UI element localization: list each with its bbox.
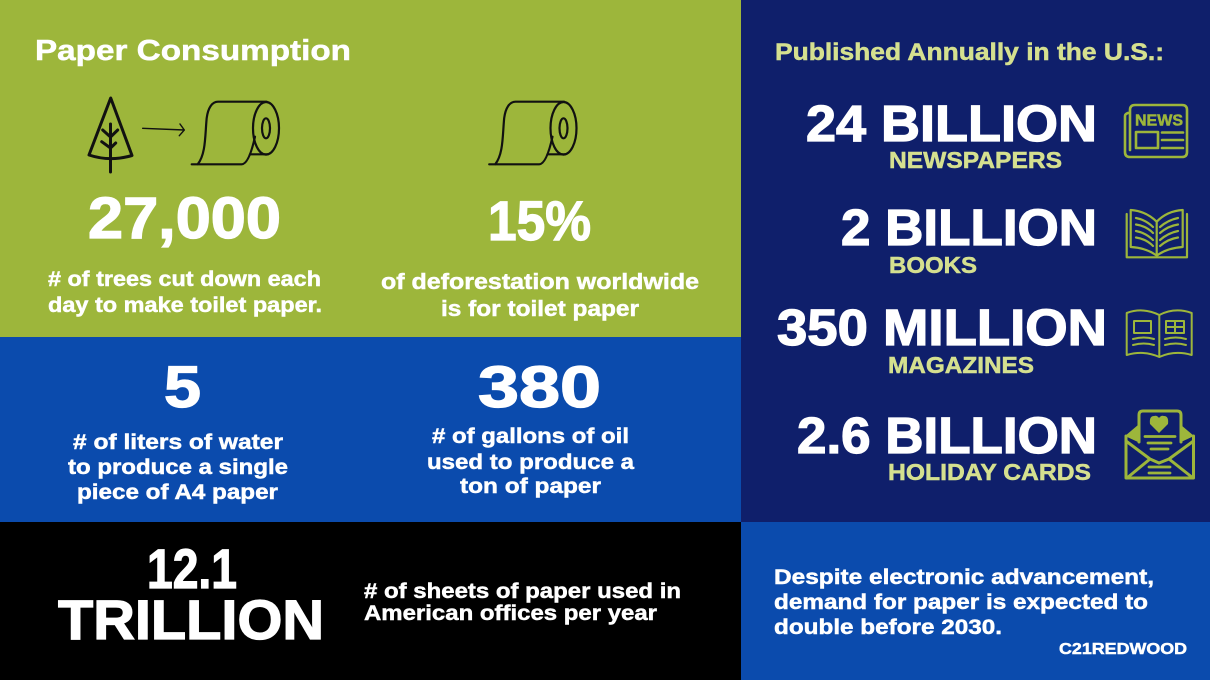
panel: published annually [741,0,1210,522]
panel: paper consumption [0,0,741,337]
stat: 12.1 trillion: 12.1 [147,537,237,600]
text: paper demand [774,565,1154,639]
text: water description: to produce a single [68,455,288,479]
icon: newspaper [1125,105,1187,157]
stat: 12.1 trillion: TRILLION [58,588,324,651]
stat: 15%: 15% [488,189,591,252]
heading: published annually: Published Annually in the U.S.: [775,39,1164,66]
heading: paper consumption: Paper Consumption [35,35,351,67]
text: paper demand: Despite electronic advancement, [774,565,1154,589]
stat: magazines [777,299,1107,378]
text: water description [68,430,288,504]
stat: magazines: 350 MILLION [777,299,1107,356]
text: office sheets description: # of sheets of paper used in [364,579,681,603]
text: water description: # of liters of water [73,430,284,454]
stat: newspapers: NEWSPAPERS [889,147,1062,173]
text: oil description: ton of paper [460,474,602,498]
logo: C21 Redwood: C21REDWOOD [1059,641,1187,658]
icon: tree to toilet roll [89,98,279,172]
stat: holiday cards: HOLIDAY CARDS [888,459,1091,485]
icon: arrow [143,124,184,136]
text: paper demand: double before 2030. [774,615,1002,639]
stat: newspapers: 24 BILLION [806,95,1097,152]
text: oil description [427,424,635,498]
text: trees description [48,267,322,317]
panel: office paper [0,522,741,680]
panel: paper demand callout [741,522,1210,680]
stat: books [841,199,1097,278]
stat: holiday cards: 2.6 BILLION [797,407,1097,464]
stat: 27,000: 27,000 [88,186,281,251]
text: oil description: used to produce a [427,450,635,474]
stat: newspapers [806,95,1097,173]
text: paper demand: demand for paper is expected to [774,590,1148,614]
icon: tree [89,98,132,172]
icon: newspaper: NEWS [1135,112,1183,130]
text: deforestation description: is for toilet paper [441,296,639,321]
icon: open book [1127,210,1187,257]
stat: 380: 380 [478,355,601,420]
icon: toilet roll 2 [489,102,576,164]
text: oil description: # of gallons of oil [432,424,629,448]
panel: water and oil [0,337,741,522]
icon: magazine [1127,310,1192,357]
text: water description: piece of A4 paper [77,480,279,504]
stat: books: 2 BILLION [841,199,1097,256]
text: office sheets description: American offices per year [364,601,658,625]
text: trees description: day to make toilet paper. [48,293,322,317]
icon: holiday card envelope [1125,411,1194,478]
icon: toilet roll [192,102,279,164]
text: trees description: # of trees cut down each [48,267,321,291]
stat: 12.1 trillion [58,537,324,651]
stat: 5: 5 [164,355,201,420]
stat: magazines: MAGAZINES [888,352,1034,378]
stat: books: BOOKS [889,252,977,278]
text: deforestation description [381,269,699,321]
text: deforestation description: of deforestation worldwide [381,269,699,294]
text: office sheets description [364,579,681,625]
